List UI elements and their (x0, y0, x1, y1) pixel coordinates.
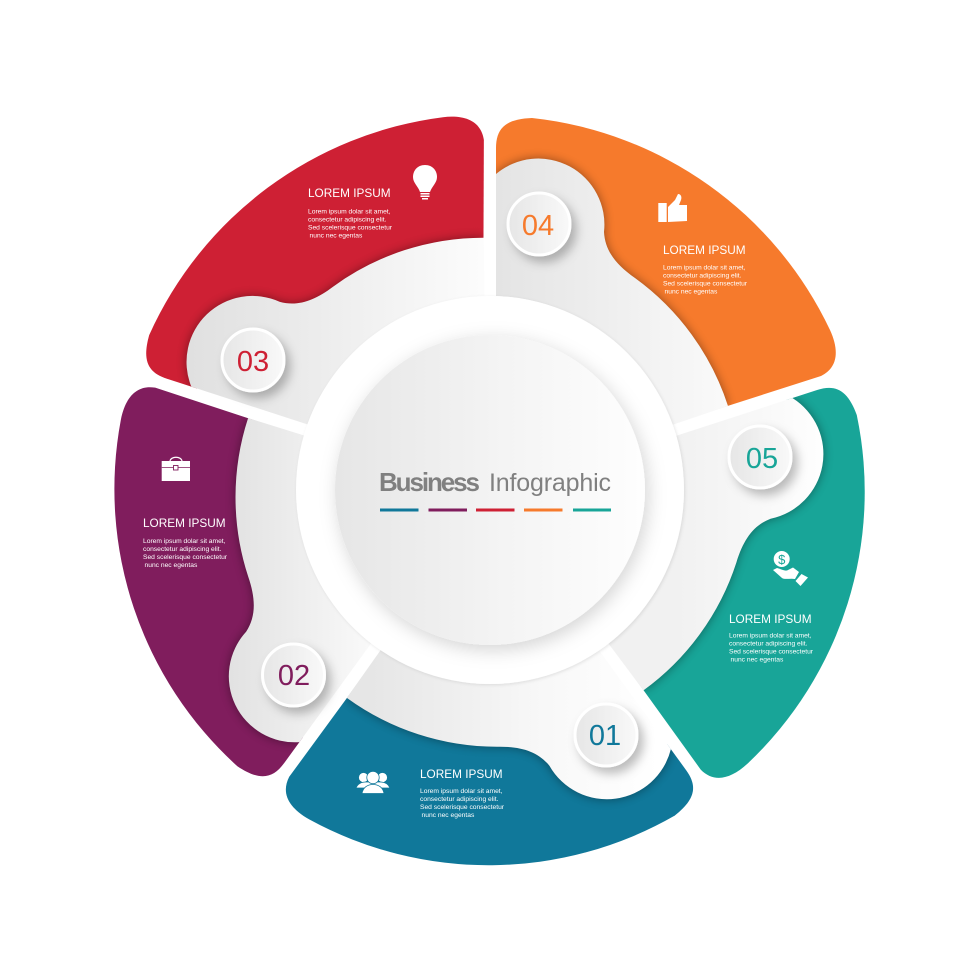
panel: 01 blue (286, 650, 694, 866)
panel: 02 purple: 02 (278, 660, 310, 692)
panel: 05 teal: $ (778, 552, 786, 567)
panel: 05 teal: nunc nec egentas (730, 656, 784, 664)
panel: 05 teal: Lorem ipsum dolar sit amet, (729, 632, 812, 640)
title colour dashes (380, 508, 611, 512)
panel: 05 teal: LOREM IPSUM (729, 612, 812, 626)
panel: 04 orange: 04 (522, 210, 554, 242)
panel: 01 blue: 01 (589, 720, 621, 752)
panel: 01 blue: Sed scelerisque consectetur (420, 804, 505, 811)
panel: 02 purple: nunc nec egentas (144, 562, 198, 569)
panel: 03 red: LOREM IPSUM (308, 186, 391, 200)
panel: 03 red: Sed scelerisque consectetur (308, 224, 393, 232)
white ring (296, 296, 684, 684)
panel: 03 red: Lorem ipsum dolar sit amet, (308, 208, 391, 216)
panel: 01 blue: consectetur adipiscing elit. (420, 796, 499, 803)
panel: 01 blue: LOREM IPSUM (420, 767, 503, 781)
panel: 05 teal: 05 (746, 443, 778, 475)
panel: 04 orange: Sed scelerisque consectetur (663, 280, 748, 288)
panel: 01 blue: Lorem ipsum dolar sit amet, (420, 788, 503, 795)
central disk (335, 335, 645, 645)
title (379, 467, 611, 497)
panel: 04 orange: LOREM IPSUM (663, 243, 746, 257)
panel: 03 red (146, 116, 484, 424)
panel: 03 red: nunc nec egentas (310, 232, 363, 240)
title: Business (379, 467, 480, 497)
panel: 05 teal: Sed scelerisque consectetur (729, 648, 814, 656)
panel: 02 purple: consectetur adipiscing elit. (143, 546, 222, 553)
panel: 03 red: consectetur adipiscing elit. (308, 216, 387, 224)
panel: 05 teal: consectetur adipiscing elit. (729, 640, 808, 648)
panel: 01 blue: nunc nec egentas (422, 812, 475, 819)
title: Infographic (489, 469, 611, 497)
panel: 02 purple: Lorem ipsum dolar sit amet, (143, 538, 226, 545)
panel: 04 orange: consectetur adipiscing elit. (663, 272, 742, 280)
panel: 04 orange: Lorem ipsum dolar sit amet, (663, 264, 746, 272)
panel: 02 purple: Sed scelerisque consectetur (143, 554, 228, 561)
panel: 04 orange (496, 118, 836, 425)
panel: 05 teal (608, 388, 865, 778)
panel: 02 purple: LOREM IPSUM (143, 516, 226, 530)
panel: 04 orange: nunc nec egentas (664, 288, 718, 296)
panel: 02 purple (114, 387, 356, 776)
panel: 03 red: 03 (237, 346, 269, 378)
